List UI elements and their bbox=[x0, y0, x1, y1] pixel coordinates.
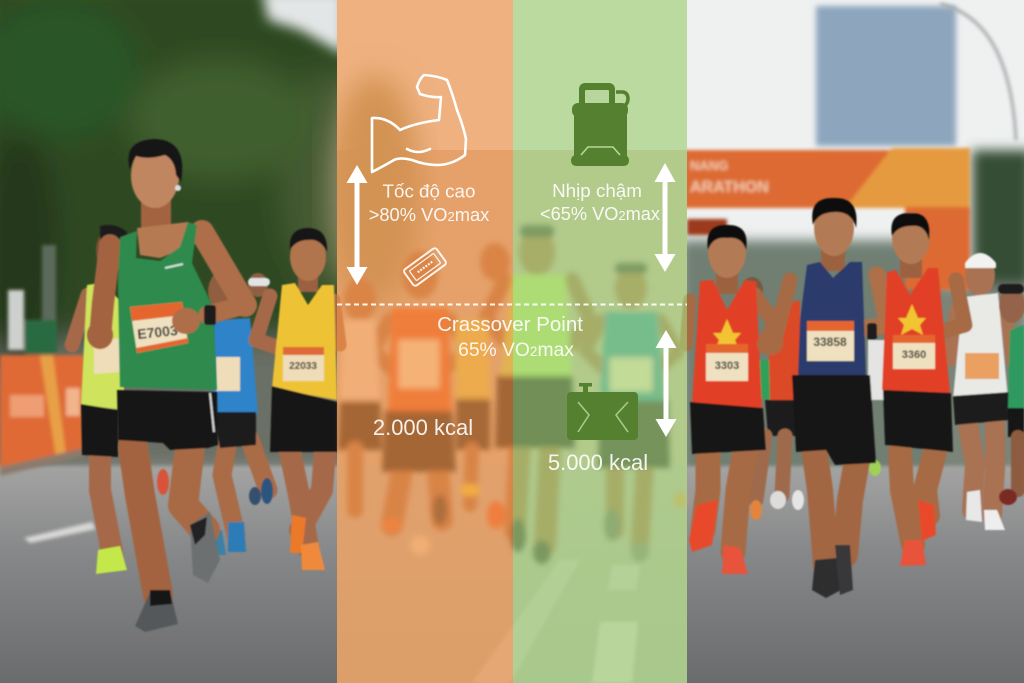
runner: red singlet with star, left bbox=[686, 225, 775, 574]
text: high speed label: Tốc độ cao bbox=[383, 180, 475, 202]
road lane mark bbox=[24, 522, 96, 543]
right side background runners bbox=[686, 198, 1024, 598]
runner: blue singlet bbox=[157, 270, 273, 555]
blurred runners behind bbox=[338, 243, 686, 529]
distant trees on the right bbox=[680, 150, 1024, 480]
blurred runners behind the panels bbox=[338, 225, 686, 564]
text: glycogen calories: 2.000 kcal bbox=[373, 415, 473, 440]
icon: flexed muscle arm bbox=[372, 75, 466, 172]
text: fat calories: 5.000 kcal bbox=[548, 450, 648, 475]
sky patch and building on the right bbox=[262, 0, 1024, 290]
runner: mid crowd behind bbox=[741, 277, 884, 520]
text: crossover point label: Crassover Point bbox=[437, 313, 583, 336]
runner: yellow singlet bbox=[256, 228, 340, 570]
foreground runner: green singlet: E7003 bbox=[137, 322, 179, 342]
panel: green slow-pace side bbox=[513, 0, 687, 683]
orange finish banner bbox=[684, 148, 970, 290]
icon: energy gel packet bbox=[403, 247, 447, 287]
text: crossover point label: 65% VO2max bbox=[458, 340, 574, 361]
arrow: right panel lower vertical double arrow bbox=[656, 330, 676, 437]
blurred runner: lime singlet with cap bbox=[485, 225, 590, 564]
text: slow pace label bbox=[540, 180, 660, 224]
orange roadside barrier bbox=[0, 245, 85, 476]
crossover dashed line bbox=[337, 304, 687, 306]
runner: white singlet with cap bbox=[950, 253, 1024, 530]
runner: red singlet with star, right bbox=[882, 212, 965, 566]
road bbox=[0, 466, 1024, 683]
panel: orange high-speed side bbox=[337, 0, 513, 683]
runner: green singlet at frame edge bbox=[998, 284, 1024, 505]
orange finish banner: ARATHON bbox=[690, 179, 769, 196]
text: high speed label bbox=[369, 180, 489, 225]
text: slow pace label: <65% VO2max bbox=[540, 204, 660, 224]
icon: jerry can, dark green bbox=[567, 383, 638, 440]
orange finish banner: NANG bbox=[690, 158, 728, 173]
washed backdrop under the panels bbox=[330, 0, 687, 683]
runner: red singlet with star, right: 3360 bbox=[902, 349, 926, 361]
arrow: left panel vertical double arrow bbox=[346, 165, 368, 285]
left side background runners bbox=[72, 225, 340, 574]
blurred runner: orange singlet bbox=[372, 251, 470, 555]
trees on the left bbox=[0, 0, 380, 480]
text: crossover point label bbox=[437, 313, 583, 361]
icon: fuel bottle, dark green bbox=[571, 83, 629, 166]
runner: red singlet with star, left: 3303 bbox=[715, 360, 739, 372]
blurred runner: teal singlet with cap bbox=[585, 263, 678, 562]
text: high speed label: >80% VO2max bbox=[369, 204, 489, 225]
runner: navy singlet, centre: 33858 bbox=[813, 335, 847, 349]
runner: navy singlet, centre bbox=[757, 198, 888, 598]
text: slow pace label: Nhịp chậm bbox=[552, 180, 642, 201]
runner: yellow singlet: 22033 bbox=[289, 361, 317, 372]
arrow: right panel upper vertical double arrow bbox=[654, 163, 676, 272]
runner: lime singlet bbox=[72, 225, 128, 574]
foreground runner: green singlet bbox=[87, 139, 245, 632]
